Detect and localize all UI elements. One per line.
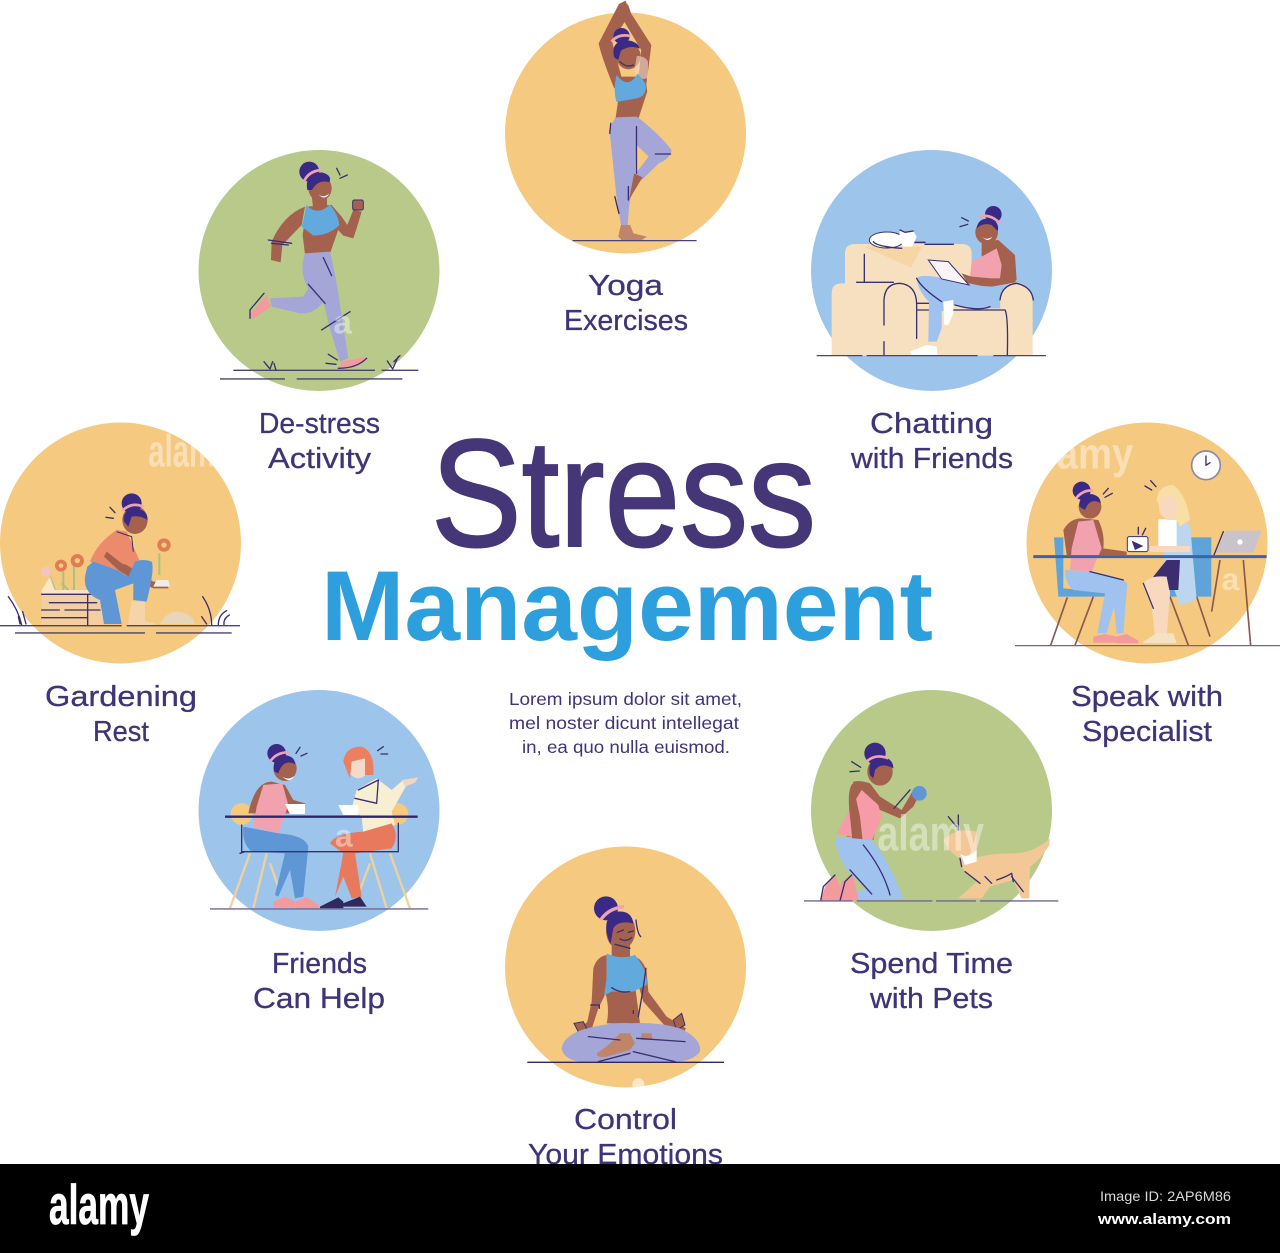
illustration: woman playing with dog — [804, 743, 1058, 901]
label: control your emotions — [528, 1104, 723, 1171]
title — [321, 408, 933, 661]
circle: chatting background — [811, 150, 1052, 391]
illustration: two friends with coffee at a table: a — [335, 818, 353, 854]
label: spend time with pets: Spend Time — [850, 948, 1013, 980]
panel: gardening rest — [0, 422, 241, 748]
label: speak with specialist: Speak with — [1071, 681, 1223, 713]
body text: in, ea quo nulla euismod. — [522, 737, 730, 757]
illustration: woman meditating — [527, 896, 724, 1090]
label: chatting with friends — [850, 408, 1013, 475]
label: friends can help — [253, 948, 385, 1015]
title line: Stress: Stress — [431, 408, 816, 579]
illustration: woman in tree pose — [573, 1, 697, 241]
image id: Image ID: 2AP6M86 — [1100, 1188, 1231, 1204]
panel: de-stress activity — [198, 150, 440, 475]
illustration: woman planting flowers — [0, 426, 240, 633]
circle: pets background — [811, 690, 1052, 931]
label: chatting with friends: with Friends — [850, 443, 1013, 475]
label: control your emotions: Control — [574, 1104, 677, 1136]
label: gardening rest — [45, 681, 197, 748]
body text: Lorem ipsum dolor sit amet, — [509, 689, 742, 709]
label: chatting with friends: Chatting — [870, 408, 993, 440]
panel: yoga exercises — [505, 1, 746, 337]
footer logo: alamy — [49, 1173, 149, 1236]
label: spend time with pets: with Pets — [869, 983, 993, 1015]
label: de-stress activity — [259, 408, 380, 475]
label: gardening rest: Rest — [93, 716, 149, 748]
circle: friends background — [198, 690, 440, 931]
label: spend time with pets — [850, 948, 1013, 1015]
circle: yoga background — [505, 12, 746, 254]
illustration: patient and doctor at a table: a — [1222, 561, 1240, 597]
illustration: woman running — [220, 162, 418, 379]
illustration: woman planting flowers: alam — [148, 426, 215, 477]
panel: friends can help — [198, 690, 440, 1015]
panel: speak with specialist — [1015, 422, 1280, 748]
circle: running background — [198, 150, 440, 391]
circle: gardening background — [0, 422, 241, 664]
label: gardening rest: Gardening — [45, 681, 197, 713]
label: friends can help: Friends — [272, 948, 367, 980]
label: de-stress activity: Activity — [268, 443, 372, 475]
label: friends can help: Can Help — [253, 983, 385, 1015]
label: yoga exercises — [564, 270, 688, 337]
illustration: two friends with coffee at a table — [210, 744, 428, 909]
label: speak with specialist — [1071, 681, 1223, 748]
illustration: woman on sofa with laptop and cat — [817, 206, 1046, 356]
illustration: woman running: a — [333, 305, 352, 342]
circle: meditation background — [505, 846, 746, 1088]
icon: wall clock — [1192, 451, 1220, 480]
illustration: patient and doctor at a table — [1015, 430, 1280, 646]
label: speak with specialist: Specialist — [1082, 716, 1212, 748]
label: de-stress activity: De-stress — [259, 408, 380, 440]
footer band — [0, 1164, 1280, 1253]
label: yoga exercises: Exercises — [564, 305, 688, 337]
illustration: patient and doctor at a table: amy — [1057, 430, 1133, 478]
illustration: woman playing with dog: alamy — [877, 806, 984, 862]
panel: control your emotions — [505, 846, 746, 1171]
body text — [509, 689, 742, 757]
panel: spend time with pets — [804, 690, 1058, 1015]
label: yoga exercises: Yoga — [588, 270, 664, 302]
label: control your emotions: Your Emotions — [528, 1139, 723, 1171]
website: www.alamy.com — [1097, 1211, 1231, 1228]
body text: mel noster dicunt intellegat — [509, 713, 739, 733]
panel: chatting with friends — [811, 150, 1052, 475]
title line: Management: Management — [321, 550, 933, 661]
circle: specialist background — [1026, 422, 1268, 664]
